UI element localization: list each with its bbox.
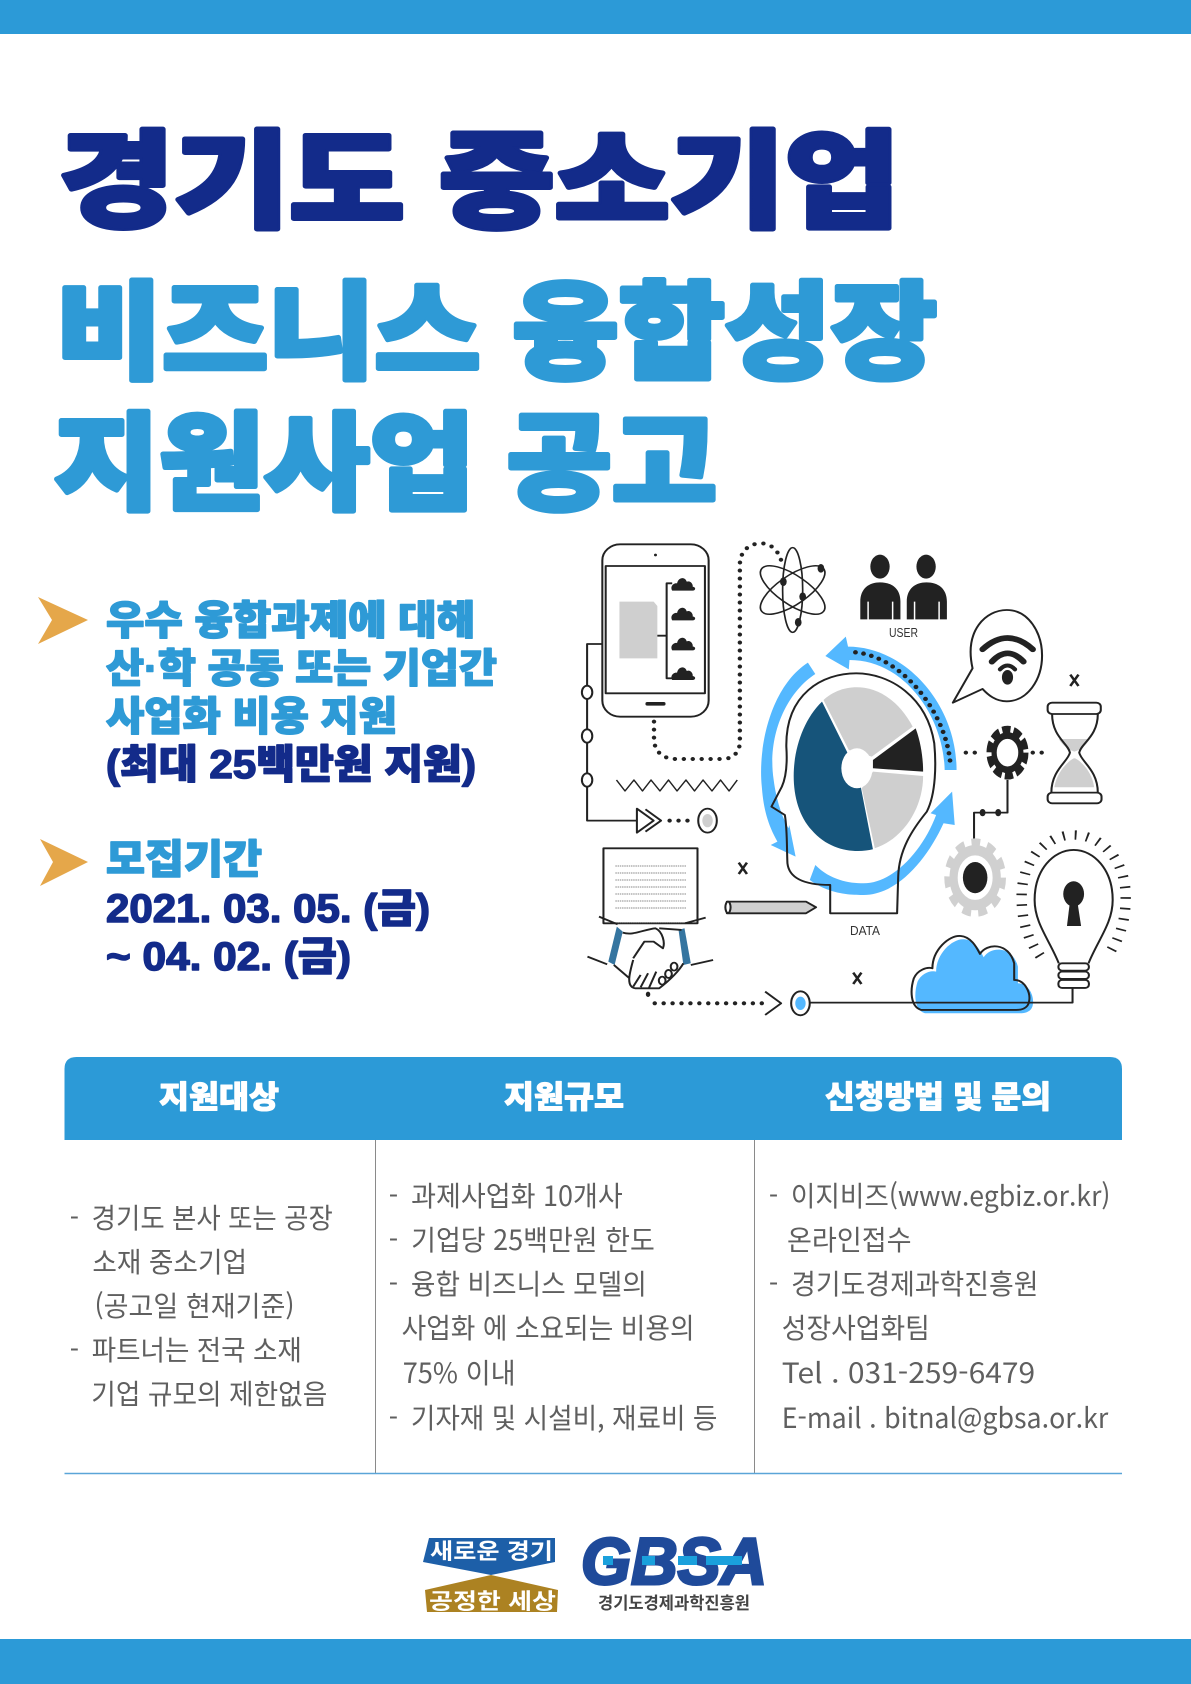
column 3 text: E-mail . bitnal@gbsa.or.kr — [782, 1397, 1108, 1437]
column 2 text: - 기자재 및 시설비, 재료비 등 — [389, 1397, 717, 1437]
icon: light bulb with keyhole — [1022, 835, 1126, 988]
GBSA organization name: 경기도경제과학진흥원 — [598, 1594, 750, 1613]
column 2 text: - 과제사업화 10개사 — [389, 1175, 623, 1215]
icon: gray gear — [949, 845, 1001, 911]
icon: orange arrow 2 — [40, 839, 88, 886]
table bottom rule — [64, 1472, 1122, 1474]
column 1 text: (공고일 현재기준) — [94, 1285, 294, 1325]
GBSA wordmark: GBSA — [581, 1524, 767, 1598]
column 2 text: 사업화 에 소요되는 비용의 — [402, 1307, 695, 1347]
icon: document — [603, 848, 697, 923]
logo slogan bottom: 공정한 세상 — [429, 1589, 556, 1614]
info table — [64, 1057, 1122, 1474]
title line 2: 비즈니스 융합성장 — [56, 275, 937, 393]
icon: atom — [752, 548, 833, 632]
support summary block — [38, 597, 497, 787]
header: scale: 지원규모 — [504, 1080, 624, 1115]
icon: pencil — [725, 902, 816, 913]
column 3 text: 성장사업화팀 — [782, 1307, 930, 1347]
column 3 text: - 경기도경제과학진흥원 — [769, 1263, 1038, 1303]
icon: blue cycle arrows — [761, 637, 957, 895]
bottom band — [0, 1639, 1191, 1684]
table column dividers — [376, 1140, 754, 1473]
title — [54, 124, 937, 524]
circuit line with arrow — [582, 644, 737, 833]
column 2 text: 75% 이내 — [403, 1352, 516, 1392]
icon: blue cloud with connector — [646, 936, 1073, 1015]
period end: ~ 04. 02. (금) — [106, 935, 351, 979]
logo blue banner — [423, 1538, 555, 1575]
column 3 text: 온라인접수 — [787, 1219, 912, 1259]
dotted connector from phone to atom — [654, 543, 782, 759]
icon: handshake — [587, 917, 713, 988]
header: target: 지원대상 — [159, 1080, 279, 1115]
icon: hourglass — [1048, 703, 1102, 803]
column 1 text: 기업 규모의 제한없음 — [91, 1373, 327, 1413]
icon: x marks — [739, 675, 1078, 984]
summary text line 2: 산·학 공동 또는 기업간 — [106, 647, 497, 691]
column 3 text — [769, 1175, 1110, 1437]
column 1 text: 소재 중소기업 — [92, 1241, 247, 1281]
column 3 text: - 이지비즈(www.egbiz.or.kr) — [769, 1175, 1110, 1215]
column 1 text — [70, 1197, 333, 1413]
illustration label: DATA: DATA — [850, 923, 880, 938]
logo slogan top: 새로운 경기 — [430, 1539, 553, 1564]
column 1 text: - 파트너는 전국 소재 — [70, 1329, 302, 1369]
column 2 text: - 융합 비즈니스 모델의 — [389, 1263, 647, 1303]
summary text line 3: 사업화 비용 지원 — [106, 695, 397, 739]
top band — [0, 0, 1191, 34]
summary text line 4: (최대 25백만원 지원) — [106, 743, 476, 787]
period label: 모집기간 — [106, 838, 262, 882]
icon: head with pie chart — [771, 673, 935, 913]
icon: wifi speech bubble — [953, 610, 1042, 703]
logo: new gyeonggi — [423, 1538, 558, 1614]
logo gold banner — [425, 1575, 558, 1612]
header: how to apply: 신청방법 및 문의 — [825, 1080, 1051, 1115]
logo: GBSA — [581, 1524, 767, 1613]
icon: smartphone — [602, 544, 709, 717]
illustration label: USER: USER — [889, 625, 918, 640]
title line 1: 경기도 중소기업 — [59, 124, 900, 242]
icon: users — [860, 555, 947, 619]
column 3 text: Tel . 031-259-6479 — [782, 1352, 1035, 1392]
GBSA cyan accents — [603, 1556, 742, 1565]
period start: 2021. 03. 05. (금) — [106, 887, 430, 931]
column 2 text: - 기업당 25백만원 한도 — [389, 1219, 655, 1259]
title line 3: 지원사업 공고 — [54, 406, 717, 524]
icon: orange arrow 1 — [38, 597, 88, 644]
illustration — [582, 543, 1126, 1015]
recruitment period block — [40, 838, 430, 979]
icon: dark gear — [966, 731, 1049, 845]
table header bar — [64, 1057, 1122, 1140]
summary text line 1: 우수 융합과제에 대해 — [106, 599, 475, 643]
column 2 text — [389, 1175, 717, 1437]
column 1 text: - 경기도 본사 또는 공장 — [70, 1197, 333, 1237]
